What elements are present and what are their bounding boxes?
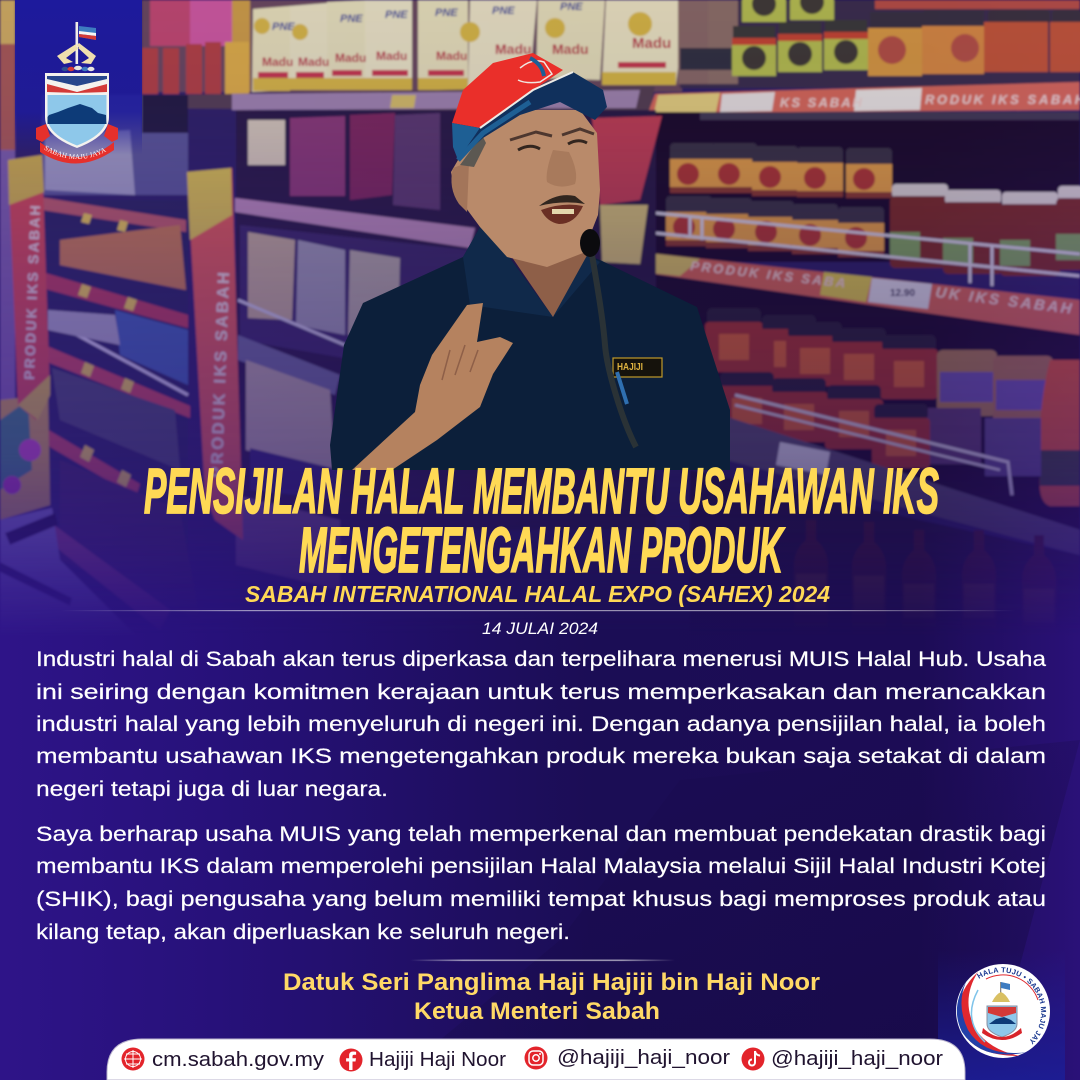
- banner: produk IKS Sabah, left: [8, 155, 50, 420]
- top row of packets: PNE: [492, 5, 515, 17]
- name badge and pen: [613, 358, 662, 377]
- top row of packets: Madu: [298, 55, 329, 69]
- top row of packets: Madu: [335, 51, 366, 65]
- cap side panel: [452, 123, 480, 160]
- ribbon: [40, 142, 114, 164]
- shelf strip: upper: [120, 82, 1080, 113]
- moustache and mouth: [539, 195, 585, 206]
- round badge: Hala Tuju Sabah Maju Jaya: HALA TUJU • SABAH MAJU JAYA: [976, 967, 1046, 1044]
- cap crown: [452, 53, 563, 128]
- top row of packets: Madu: [376, 49, 407, 63]
- top row of packets: PNE: [340, 13, 363, 25]
- body paragraph 1: negeri tetapi juga di luar negara.: [36, 778, 388, 801]
- shelf strip: middle right: 12.90: [890, 288, 915, 299]
- banner: produk IKS Sabah, centre: PRODUK IKS SABAH: [208, 269, 233, 478]
- divider rule under subtitle: [60, 610, 1016, 611]
- body paragraph 1: ini seiring dengan komitmen kerajaan untuk terus memperkasakan dan merancakkan: [36, 681, 1046, 704]
- body paragraph 1: membantu usahawan IKS mengetengahkan produk mereka bukan saja setakat di dalam: [36, 745, 1046, 768]
- signature name: Datuk Seri Panglima Haji Hajiji bin Haji Noor: [283, 969, 820, 996]
- dark gap and jars, second right shelf: [645, 112, 1080, 286]
- jars, third right shelf: [640, 272, 1080, 540]
- nose: [547, 150, 576, 187]
- top row of packets: [142, 0, 686, 94]
- shelf strip: middle right: [642, 253, 1080, 335]
- banner: produk IKS Sabah, centre: [187, 168, 243, 540]
- shirt: [330, 227, 730, 470]
- top row of packets: Madu: [552, 41, 589, 57]
- beads: [62, 66, 94, 71]
- arm and hand: [352, 303, 513, 470]
- shelf strip: upper: KS SABAH: [780, 95, 864, 110]
- top row of packets: Madu: [495, 41, 532, 57]
- date: 14 JULAI 2024: [482, 620, 598, 638]
- podium: [555, 447, 730, 470]
- top row of packets: PNE: [385, 9, 408, 21]
- collar shading: [463, 227, 600, 317]
- facebook name: Hajiji Haji Noor: [369, 1049, 506, 1071]
- instagram handle: @hajiji_haji_noor: [557, 1047, 730, 1069]
- signature role: Ketua Menteri Sabah: [414, 998, 660, 1025]
- tiktok handle: @hajiji_haji_noor: [771, 1048, 943, 1070]
- neck: [507, 250, 590, 317]
- ear and hair: [451, 162, 469, 212]
- brows and eyes: [510, 129, 594, 140]
- shelf strip: middle right: PRODUK IKS SABA: [690, 258, 848, 291]
- ornament rule above signature: [410, 960, 675, 961]
- left poster and floor: [0, 150, 140, 640]
- bottom right shelf and bottles: [690, 408, 1080, 660]
- arms: [57, 43, 96, 64]
- centre and left shelves behind speaker: [235, 110, 662, 590]
- top row of packets: PNE: [272, 21, 295, 33]
- speaker photo: HAJIJI: [617, 362, 643, 373]
- icon: instagram: [524, 1046, 548, 1070]
- subtitle: SABAH INTERNATIONAL HALAL EXPO (SAHEX) 2024: [245, 581, 830, 607]
- icon: facebook: [340, 1048, 362, 1072]
- speaker photo: [330, 53, 730, 470]
- state crest, top left: SABAH MAJU JAYA: [44, 146, 106, 159]
- top row of packets: Madu: [436, 49, 467, 63]
- flag and pole: [76, 22, 78, 64]
- face: [451, 110, 600, 267]
- top row of packets: PNE: [560, 1, 583, 13]
- banner: produk IKS Sabah, left: PRODUK IKS SABAH: [21, 203, 43, 380]
- left gondola racks: [0, 0, 200, 630]
- top row of packets: PNE: [435, 7, 458, 19]
- top-left blue panel behind crest: [15, 0, 142, 155]
- social media pill: [107, 1039, 965, 1080]
- body paragraph 2: kilang tetap, akan diperluaskan ke seluruh negeri.: [36, 921, 570, 944]
- state crest, top left: [36, 22, 118, 164]
- top row of packets: Madu: [262, 55, 293, 69]
- mini crest: [982, 982, 1022, 1040]
- icon: tiktok: [742, 1048, 764, 1070]
- body paragraph 1: industri halal yang lebih menyeluruh di negeri ini. Dengan adanya pensijilan halal, ia boleh: [36, 713, 1046, 736]
- title: [144, 455, 939, 586]
- microphone: [592, 255, 636, 447]
- top right jars: [678, 0, 1080, 88]
- body paragraph 1: [36, 648, 1046, 801]
- body paragraph 2: membantu IKS dalam memperolehi pensijilan Halal Malaysia melalui Sijil Halal Industri Kotej: [36, 855, 1046, 878]
- body paragraph 1: Industri halal di Sabah akan terus diperkasa dan terpelihara menerusi MUIS Halal Hub. Usaha: [36, 648, 1046, 671]
- cap visor: [458, 72, 607, 160]
- top row of packets: Madu: [632, 35, 671, 52]
- shelf strip: middle right: UK IKS SABAH: [935, 284, 1075, 318]
- body paragraph 2: (SHIK), bagi pengusaha yang belum memiliki tempat khusus bagi memproses produk atau: [36, 888, 1046, 911]
- body paragraph 2: [36, 823, 1046, 944]
- icon: website globe: [122, 1048, 144, 1070]
- website: cm.sabah.gov.my: [152, 1049, 324, 1071]
- shield: [45, 73, 109, 148]
- body paragraph 2: Saya berharap usaha MUIS yang telah memperkenal dan membuat pendekatan drastik bagi: [36, 823, 1046, 846]
